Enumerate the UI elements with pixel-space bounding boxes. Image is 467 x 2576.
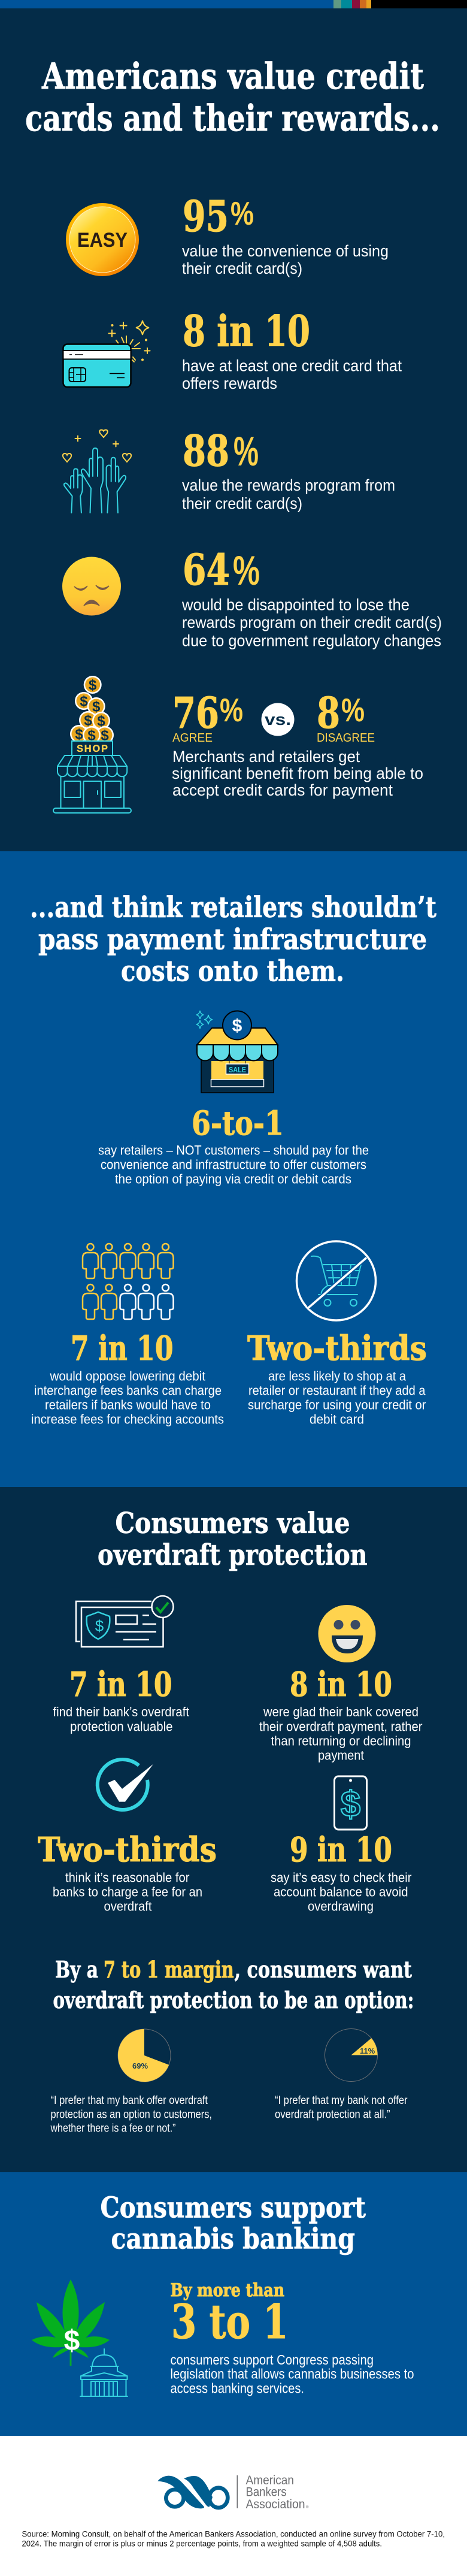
stat: 9 in 10 bbox=[271, 1830, 412, 1913]
stat: 88%: their credit card(s) bbox=[182, 495, 302, 513]
footer bbox=[0, 2436, 467, 2576]
stat: 64%: % bbox=[233, 548, 260, 594]
stat: two-thirds reasonable: think it’s reasonable for bbox=[65, 1870, 190, 1885]
stat: 95%: % bbox=[231, 195, 254, 232]
stat: 88%: % bbox=[234, 428, 259, 474]
quote: prefer overdraft option bbox=[50, 2094, 212, 2135]
icon: easy coin bbox=[66, 203, 139, 276]
stat: 8 in 10 bbox=[182, 306, 402, 392]
stat: 7 in 10 oppose: 7 in 10 bbox=[71, 1329, 174, 1368]
heading bbox=[98, 1507, 368, 1572]
stat: 8 in 10 glad: 8 in 10 bbox=[290, 1665, 392, 1704]
icon: shop with coins bbox=[53, 676, 131, 813]
stat: 64% bbox=[181, 545, 442, 649]
stat: 3 to 1: access banking services. bbox=[170, 2381, 304, 2396]
stat: two-thirds reasonable bbox=[38, 1830, 217, 1913]
icon: store front bbox=[196, 1011, 278, 1093]
chart: 69% pie: 69% bbox=[132, 2061, 148, 2070]
panel: overdraft protection bbox=[0, 1487, 467, 2172]
logo: American Bankers Association: ® bbox=[306, 2505, 309, 2510]
stat: 95%: value the convenience of using bbox=[182, 242, 389, 260]
stat: two-thirds reasonable: banks to charge a fee for an bbox=[53, 1885, 202, 1899]
source note: 2024. The margin of error is plus or minus 2 percentage points, from a weighted sample of 4,508 adults. bbox=[22, 2539, 382, 2548]
stat: 6-to-1: the option of paying via credit or debit cards bbox=[115, 1172, 351, 1186]
subheading: 7 to 1 margin: 7 to 1 margin bbox=[104, 1956, 234, 1983]
logo: American Bankers Association bbox=[157, 2474, 309, 2511]
stat: 3 to 1: By more than bbox=[170, 2280, 284, 2301]
stat: 8 in 10 glad: than returning or declining bbox=[271, 1734, 411, 1748]
stat: 9 in 10: account balance to avoid bbox=[274, 1885, 408, 1899]
stat: 7 in 10 valuable: protection valuable bbox=[70, 1719, 172, 1734]
icon: sad face bbox=[62, 557, 121, 616]
stat: two-thirds less likely: surcharge for using your credit or bbox=[248, 1397, 426, 1413]
stat: 7 in 10 valuable bbox=[53, 1665, 190, 1734]
stat: two-thirds less likely bbox=[247, 1329, 427, 1427]
icon: store front: SALE bbox=[229, 1065, 246, 1074]
stat: two-thirds less likely: retailer or restaurant if they add a bbox=[248, 1383, 426, 1398]
stat: 7 in 10 oppose: interchange fees banks can charge bbox=[34, 1383, 222, 1398]
icon: cannabis leaf with dollar: $ bbox=[64, 2325, 80, 2357]
panel: retailers and payment costs bbox=[0, 851, 467, 1487]
stat: 76% vs 8%: vs. bbox=[265, 710, 291, 728]
quote: prefer no overdraft bbox=[275, 2094, 408, 2121]
top colour bar bbox=[0, 0, 467, 8]
stat: 6-to-1: 6-to-1 bbox=[192, 1103, 284, 1142]
stat: 8 in 10 glad: payment bbox=[318, 1748, 365, 1762]
quote: prefer overdraft option: protection as an option to customers, bbox=[50, 2109, 212, 2121]
icon: cheque with shield bbox=[76, 1596, 174, 1647]
panel: credit cards and rewards bbox=[0, 8, 467, 851]
stat: 76% vs 8% bbox=[172, 688, 423, 799]
icon: smiling face bbox=[319, 1605, 376, 1662]
stat: 3 to 1: consumers support Congress passing bbox=[170, 2352, 374, 2368]
stat: two-thirds reasonable: Two-thirds bbox=[38, 1830, 217, 1870]
stat: two-thirds less likely: Two-thirds bbox=[247, 1329, 427, 1368]
icon: no shopping cart bbox=[297, 1241, 376, 1320]
stat: 6-to-1: say retailers – NOT customers – should pay for the bbox=[98, 1143, 369, 1157]
source note: Source: Morning Consult, on behalf of the American Bankers Association, conducted an online survey from October 7-10, bbox=[22, 2529, 445, 2539]
stat: 76% vs 8%: 76 bbox=[172, 688, 219, 738]
stat: 76% vs 8%: % bbox=[341, 691, 365, 728]
icon: raised hands and hearts bbox=[63, 430, 131, 513]
icon: phone with dollar: $ bbox=[341, 1784, 360, 1824]
stat: 88% bbox=[182, 425, 395, 513]
stat: 8 in 10 glad bbox=[259, 1665, 423, 1762]
stat: 95% bbox=[182, 191, 389, 277]
icon: check mark in circle bbox=[98, 1759, 153, 1810]
stat: 95%: their credit card(s) bbox=[182, 259, 302, 277]
icon: capitol building bbox=[80, 2349, 128, 2396]
stat: 7 in 10 oppose bbox=[31, 1329, 224, 1427]
stat: 88%: 88 bbox=[183, 425, 229, 476]
icon: cannabis leaf with dollar bbox=[32, 2279, 110, 2366]
heading bbox=[101, 2191, 366, 2256]
chart: 11% pie bbox=[325, 2028, 377, 2081]
stat: 76% vs 8%: DISAGREE bbox=[317, 731, 375, 745]
heading: overdraft protection bbox=[98, 1538, 368, 1572]
chart: 11% pie: 11% bbox=[360, 2046, 375, 2055]
quote: prefer no overdraft: “I prefer that my bank not offer bbox=[275, 2094, 408, 2107]
heading: Consumers support bbox=[101, 2191, 366, 2225]
stat: 8 in 10: offers rewards bbox=[182, 374, 277, 392]
subheading: 7 to 1 margin bbox=[53, 1956, 414, 2013]
stat: 64%: rewards program on their credit card(s) bbox=[182, 613, 442, 631]
source note bbox=[22, 2529, 445, 2548]
stat: 7 in 10 oppose: retailers if banks would have to bbox=[45, 1397, 211, 1413]
quote: prefer overdraft option: whether there is a fee or not.” bbox=[50, 2122, 176, 2135]
subheading: 7 to 1 margin: , consumers want bbox=[235, 1956, 412, 1983]
stat: two-thirds less likely: debit card bbox=[310, 1411, 364, 1427]
stat: 64%: would be disappointed to lose the bbox=[181, 595, 410, 613]
chart: 69% pie bbox=[118, 2029, 171, 2082]
stat: 8 in 10: 8 in 10 bbox=[183, 306, 310, 356]
heading bbox=[30, 891, 436, 988]
stat: 3 to 1: legislation that allows cannabis businesses to bbox=[170, 2366, 414, 2382]
logo: American Bankers Association: Association bbox=[245, 2498, 305, 2511]
stat: 64%: 64 bbox=[183, 545, 230, 595]
stat: 76% vs 8%: accept credit cards for payment bbox=[172, 781, 393, 799]
icon: shop with coins: SHOP bbox=[77, 743, 108, 754]
panel: cannabis banking bbox=[0, 2172, 467, 2436]
stat: 76% vs 8%: % bbox=[220, 691, 243, 728]
stat: 3 to 1 bbox=[170, 2280, 414, 2396]
heading: cannabis banking bbox=[111, 2223, 355, 2256]
stat: 76% vs 8%: significant benefit from being able to bbox=[172, 764, 423, 782]
icon: credit card with sparkles bbox=[63, 321, 150, 387]
stat: 7 in 10 oppose: increase fees for checking accounts bbox=[31, 1411, 224, 1427]
stat: 6-to-1 bbox=[98, 1103, 369, 1186]
stat: 64%: due to government regulatory changes bbox=[182, 631, 441, 649]
icon: easy coin: EASY bbox=[77, 229, 128, 252]
quote: prefer no overdraft: overdraft protection at all.” bbox=[275, 2109, 390, 2121]
stat: 76% vs 8%: 8 bbox=[317, 688, 340, 738]
heading: costs onto them. bbox=[121, 955, 344, 988]
stat: two-thirds reasonable: overdraft bbox=[104, 1899, 152, 1913]
stat: 7 in 10 valuable: find their bank’s overdraft bbox=[53, 1704, 190, 1719]
stat: 8 in 10 glad: were glad their bank covered bbox=[263, 1704, 419, 1719]
quote: prefer overdraft option: “I prefer that my bank offer overdraft bbox=[50, 2094, 208, 2107]
stat: 95%: 95 bbox=[183, 191, 229, 241]
stat: 8 in 10 glad: their overdraft payment, rather bbox=[259, 1719, 423, 1734]
title bbox=[25, 56, 440, 140]
stat: 9 in 10: overdrawing bbox=[308, 1899, 374, 1913]
logo: American Bankers Association: American bbox=[245, 2474, 294, 2487]
stat: 6-to-1: convenience and infrastructure to offer customers bbox=[101, 1157, 366, 1172]
stat: 88%: value the rewards program from bbox=[182, 476, 395, 494]
stat: 3 to 1: 3 to 1 bbox=[171, 2294, 289, 2350]
subheading: 7 to 1 margin: By a bbox=[55, 1956, 98, 1983]
stat: 9 in 10: say it’s easy to check their bbox=[271, 1870, 412, 1885]
stat: two-thirds less likely: are less likely to shop at a bbox=[268, 1368, 406, 1384]
stat: 9 in 10: 9 in 10 bbox=[290, 1830, 392, 1870]
heading: Consumers value bbox=[115, 1507, 350, 1540]
stat: 76% vs 8%: AGREE bbox=[172, 731, 213, 745]
logo: American Bankers Association: Bankers bbox=[245, 2485, 286, 2499]
icon: ten people, seven highlighted bbox=[83, 1244, 174, 1319]
stat: 7 in 10 oppose: would oppose lowering debit bbox=[50, 1368, 206, 1384]
stat: 8 in 10: have at least one credit card that bbox=[182, 357, 402, 375]
stat: 76% vs 8%: Merchants and retailers get bbox=[172, 748, 360, 766]
icon: store front: $ bbox=[232, 1016, 242, 1036]
icon: cheque with shield: $ bbox=[95, 1617, 104, 1635]
stat: 7 in 10 valuable: 7 in 10 bbox=[69, 1665, 172, 1704]
icon: phone with dollar bbox=[334, 1776, 366, 1830]
